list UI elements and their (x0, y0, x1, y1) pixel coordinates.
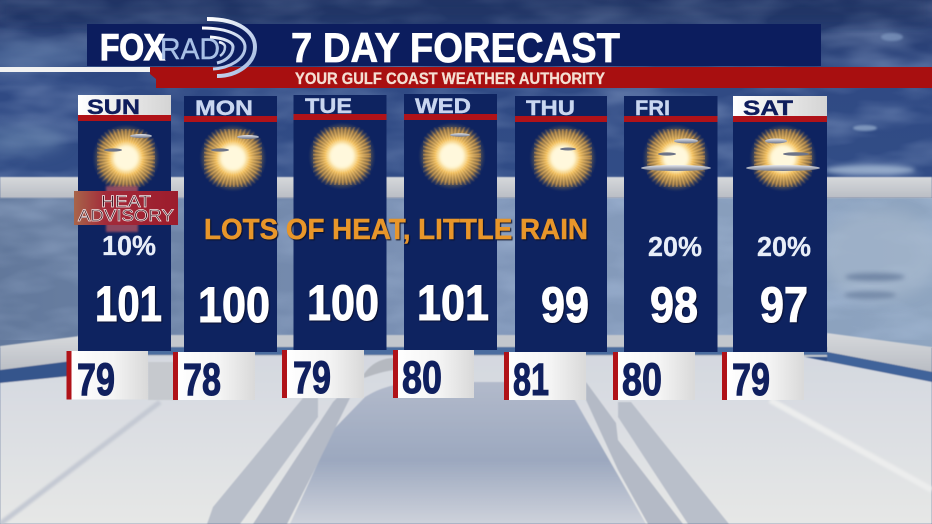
day name: WED (415, 95, 471, 118)
panel: Monday (184, 96, 277, 352)
callout: heat advisory: ADVISORY (78, 206, 174, 225)
callout: lots of heat, little rain: LOTS OF HEAT, LITTLE RAIN (204, 214, 588, 246)
icon: sun and clouds (641, 124, 711, 192)
low temperature: Tuesday: 79 (293, 352, 331, 403)
panel: Tuesday (294, 95, 386, 350)
background: stormy sky (0, 0, 932, 400)
callout: heat advisory (74, 186, 178, 232)
background: studio deck (0, 177, 932, 524)
high temperature: 100 (198, 277, 270, 333)
day header (78, 95, 171, 115)
callout: heat advisory: HEAT (101, 192, 151, 211)
high temperature: 101 (417, 275, 489, 331)
icon: sun (308, 122, 376, 190)
day header (733, 96, 827, 116)
low temperature: Thursday: 81 (513, 354, 549, 405)
day name: THU (526, 97, 575, 120)
panel: Saturday (733, 96, 827, 352)
low temperature: Tuesday (282, 350, 364, 403)
low temperature: Sunday (66, 351, 148, 405)
day name: SUN (87, 96, 140, 119)
rain chance: 10% (102, 230, 156, 261)
low temperature: Monday: 78 (183, 354, 221, 405)
low temperature: Friday (613, 352, 695, 405)
low temperature: Saturday (722, 352, 804, 405)
logo: Fox Rad: FOX (100, 27, 165, 68)
rain chance: 20% (757, 231, 811, 262)
high temperature: 98 (650, 277, 698, 333)
low temperature: Saturday: 79 (732, 354, 770, 405)
day name: SAT (743, 97, 793, 120)
low temperature: Friday: 80 (622, 354, 662, 405)
icon: sun (199, 124, 267, 192)
high temperature: 101 (95, 276, 162, 332)
day name: TUE (305, 95, 352, 118)
icon: sun (529, 124, 597, 192)
panel: Friday (624, 96, 718, 352)
icon: sun (418, 122, 486, 190)
logo: Fox Rad (100, 19, 255, 76)
heading: 7 day forecast: 7 DAY FORECAST (291, 24, 620, 71)
low temperature: Sunday: 79 (77, 354, 115, 405)
low temperature: Monday (173, 352, 255, 405)
icon: sun (92, 124, 160, 192)
tagline: YOUR GULF COAST WEATHER AUTHORITY (295, 69, 606, 88)
panel: Thursday (515, 96, 607, 352)
panel: Sunday (78, 95, 171, 351)
high temperature: 100 (307, 275, 379, 331)
low temperature: Wednesday: 80 (402, 352, 442, 403)
high temperature: 97 (760, 277, 808, 333)
panel: Wednesday (404, 94, 497, 350)
day name: MON (195, 97, 253, 120)
icon: sun and clouds (746, 124, 820, 192)
low temperature: Thursday (504, 352, 586, 405)
day name: FRI (635, 97, 670, 120)
logo: Fox Rad: RAD (160, 33, 220, 66)
rain chance: 20% (648, 231, 702, 262)
low temperature: Wednesday (393, 350, 474, 403)
title bar (0, 24, 932, 88)
high temperature: 99 (541, 277, 589, 333)
